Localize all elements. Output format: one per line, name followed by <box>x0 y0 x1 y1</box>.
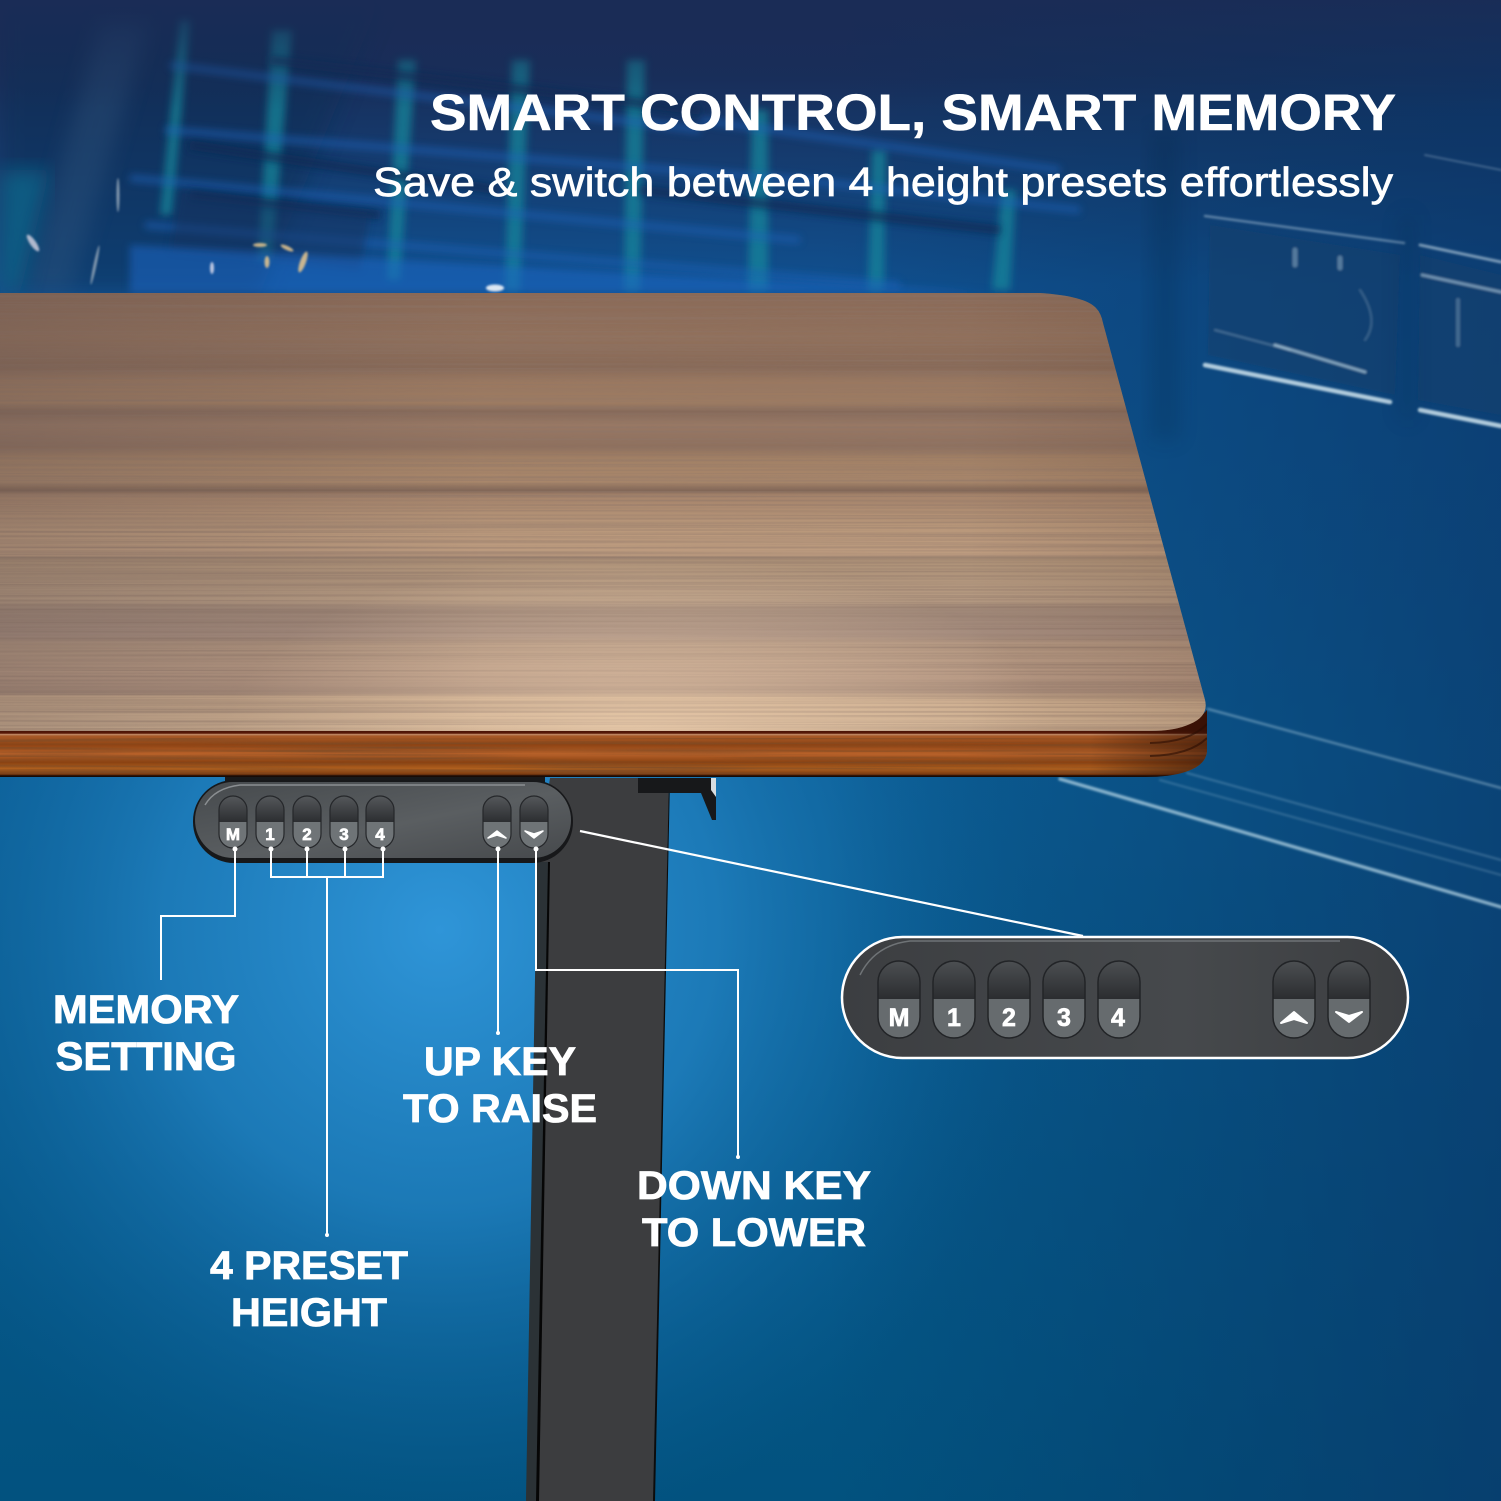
background: rack panels right <box>1205 155 1501 426</box>
small button: 3: 3 <box>339 825 349 844</box>
small button: 3 <box>330 796 358 848</box>
small button: 1 <box>256 796 284 848</box>
label: 4 preset height: HEIGHT <box>231 1291 387 1335</box>
title: SMART CONTROL, SMART MEMORY <box>430 84 1396 141</box>
large button: 3: 3 <box>1057 1004 1071 1032</box>
desktop front edge <box>0 710 1207 777</box>
small button: M: M <box>226 825 240 844</box>
large button: 2: 2 <box>1002 1004 1016 1032</box>
background: floor light streaks <box>1060 709 1501 907</box>
large button: up <box>1273 961 1315 1038</box>
large button: 3 <box>1043 961 1085 1038</box>
callout dots <box>232 846 740 1237</box>
large button: 2 <box>988 961 1030 1038</box>
label: 4 preset height: 4 PRESET <box>210 1244 408 1288</box>
small button: 2: 2 <box>302 825 312 844</box>
subtitle: Save & switch between 4 height presets effortlessly <box>373 159 1394 205</box>
desktop surface <box>0 293 1210 733</box>
large button: 1 <box>933 961 975 1038</box>
label: up key: TO RAISE <box>403 1087 597 1131</box>
large button: 1: 1 <box>947 1004 961 1032</box>
large button: M: M <box>889 1004 909 1032</box>
callout lines <box>161 831 1083 1235</box>
small button: M <box>219 796 247 848</box>
small button: 1: 1 <box>265 825 275 844</box>
small button: 4 <box>366 796 394 848</box>
small button: 4: 4 <box>375 825 385 844</box>
label: memory setting: SETTING <box>56 1035 236 1079</box>
mounting bracket <box>638 778 716 820</box>
enlarged control pad <box>842 937 1408 1058</box>
small button: down <box>520 796 548 848</box>
desk leg <box>526 778 670 1501</box>
large button: 4: 4 <box>1111 1004 1125 1032</box>
label: down key: DOWN KEY <box>637 1164 871 1208</box>
label: memory setting: MEMORY <box>53 988 239 1032</box>
label: down key: TO LOWER <box>642 1211 866 1255</box>
small button: 2 <box>293 796 321 848</box>
label: up key: UP KEY <box>424 1040 576 1084</box>
control pad on desk <box>193 777 573 863</box>
large button: M <box>878 961 920 1038</box>
background: blurred server room scene <box>0 0 1501 293</box>
small button: up <box>483 796 511 848</box>
large button: 4 <box>1098 961 1140 1038</box>
large button: down <box>1328 961 1370 1038</box>
